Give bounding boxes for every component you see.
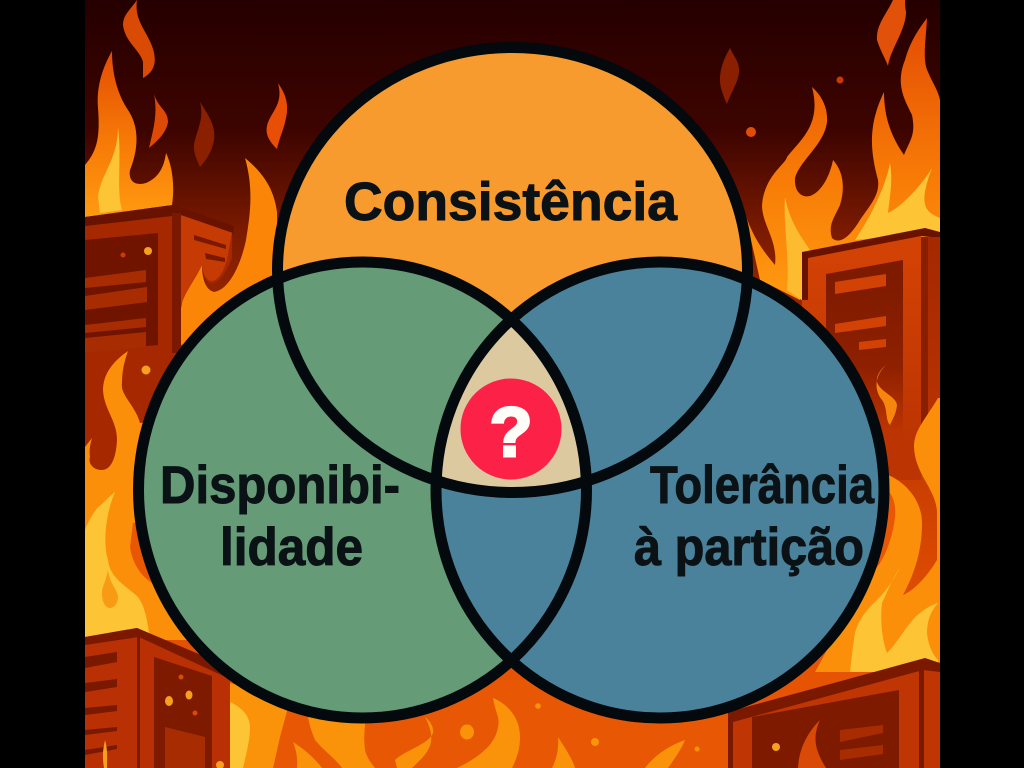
overlap: consistencia and disponibilidade xyxy=(283,268,503,473)
black circle outlines xyxy=(138,48,884,718)
circle: disponibilidade xyxy=(138,262,586,718)
label: Consistencia: Consistência xyxy=(344,172,678,232)
flames bottom centre xyxy=(230,680,730,768)
overlap: consistencia and particao xyxy=(520,268,742,474)
server rack top left xyxy=(85,205,234,470)
label: Tolerancia a particao: à partição xyxy=(634,518,864,577)
flames upper left xyxy=(85,0,287,345)
label: Disponibilidade: lidade xyxy=(220,518,363,577)
centre overlap of all three circles xyxy=(442,327,581,487)
label: Disponibilidade xyxy=(160,456,400,577)
circle: tolerancia a particao xyxy=(436,262,884,718)
label: Tolerancia a particao xyxy=(634,456,874,577)
flames upper right xyxy=(720,0,940,303)
server rack bottom left xyxy=(85,628,232,768)
server rack bottom right xyxy=(728,658,940,768)
server rack top right xyxy=(802,228,940,480)
label: Tolerancia a particao: Tolerância xyxy=(650,456,874,515)
flames mid and lower left xyxy=(85,351,190,640)
venn diagram xyxy=(138,48,884,718)
icon: question mark badge: ? xyxy=(490,393,532,471)
flames lower right xyxy=(815,364,940,672)
label: Disponibilidade: Disponibi- xyxy=(160,456,400,515)
circle: consistencia xyxy=(278,48,748,492)
icon: question mark badge xyxy=(460,378,562,480)
